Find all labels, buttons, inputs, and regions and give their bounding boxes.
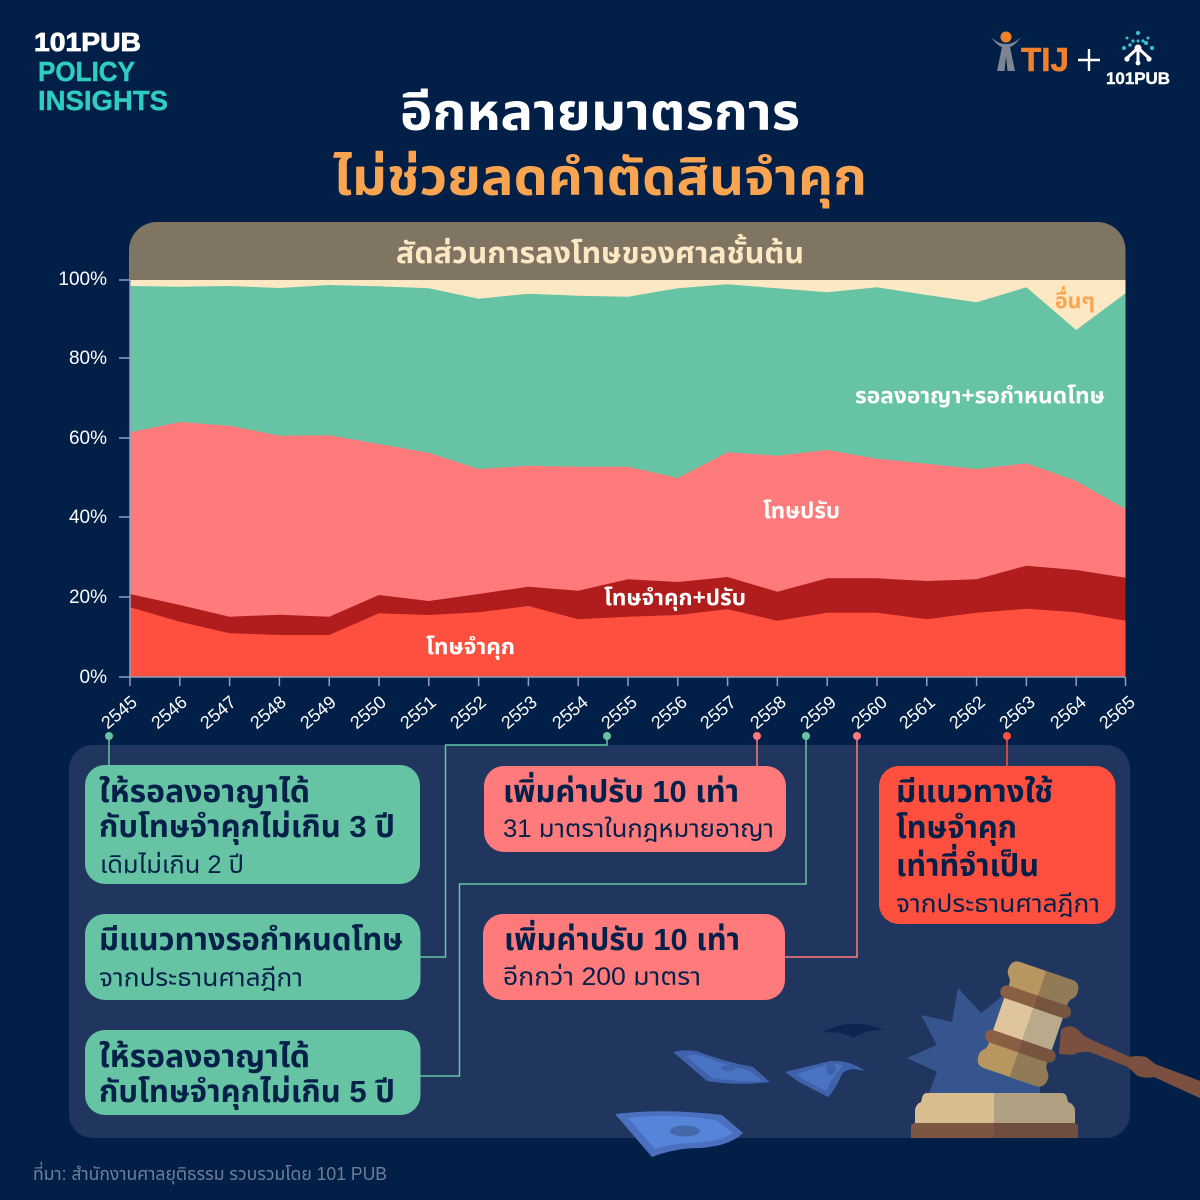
area: others <box>130 280 1126 677</box>
x axis year labels: 2555 <box>597 692 641 733</box>
panel: policy timeline background <box>69 745 1130 1138</box>
card: suspended sentence up to 5 years: กับโทษจำคุกไม่เกิน 5 ปี <box>99 1074 395 1110</box>
icon: gavel base <box>911 1093 1078 1138</box>
area: suspended sentence <box>130 284 1126 677</box>
label: others: อื่นๆ <box>1055 286 1095 313</box>
card: guideline on deferred sentencing: มีแนวทางรอกำหนดโทษ <box>99 922 403 957</box>
icon: bill large <box>615 1111 743 1157</box>
card: imprisonment only as necessary: โทษจำคุก <box>896 810 1017 846</box>
card: imprisonment only as necessary: เท่าที่จำเป็น <box>896 843 1039 883</box>
card: imprisonment only as necessary: มีแนวทางใช้ <box>896 774 1053 809</box>
icon: gavel handle <box>1060 1027 1200 1097</box>
label: jail plus fine: โทษจำคุก+ปรับ <box>604 585 746 611</box>
y axis labels: 60% <box>69 428 107 449</box>
card: guideline on deferred sentencing <box>85 914 420 1000</box>
y axis labels: 20% <box>69 587 107 608</box>
icon: TIJ figure <box>991 32 1021 71</box>
x axis year labels: 2552 <box>446 692 490 733</box>
label: fine: โทษปรับ <box>763 498 840 523</box>
x axis year labels: 2551 <box>396 692 440 733</box>
card: suspended sentence up to 3 years: กับโทษจำคุกไม่เกิน 3 ปี <box>99 809 395 845</box>
card: suspended sentence up to 3 years <box>85 765 420 884</box>
x axis year labels: 2561 <box>895 692 939 733</box>
logo: 101PUB Policy Insights: POLICY <box>38 56 135 87</box>
icon: bill right <box>785 1061 865 1097</box>
timeline markers <box>105 732 1011 740</box>
icon: burst <box>907 988 1040 1093</box>
x axis year labels: 2560 <box>847 692 891 733</box>
label: jail: โทษจำคุก <box>426 634 515 660</box>
chart: stacked area of first-instance court sentences <box>58 222 1139 733</box>
chart header <box>129 222 1126 280</box>
y axis labels: 80% <box>69 348 107 369</box>
y axis labels: 40% <box>69 507 107 528</box>
area: jail plus fine <box>130 566 1126 677</box>
card: imprisonment only as necessary: จากประธานศาลฎีกา <box>896 890 1100 918</box>
logo: 101PUB Policy Insights: INSIGHTS <box>38 85 168 116</box>
x axis year labels: 2559 <box>796 692 840 733</box>
title <box>333 84 867 208</box>
x axis year labels: 2563 <box>995 692 1039 733</box>
chart header: สัดส่วนการลงโทษของศาลชั้นต้น <box>396 233 804 270</box>
logo: TIJ + 101PUB <box>991 31 1170 88</box>
x axis year labels: 2565 <box>1095 692 1139 733</box>
axes <box>119 280 1126 686</box>
x axis year labels: 2558 <box>746 692 790 733</box>
logo: 101PUB Policy Insights: 101PUB <box>34 27 141 57</box>
connector lines <box>109 736 1007 1076</box>
x axis year labels: 2548 <box>246 692 290 733</box>
card: fines up 10x, 200+ sections: เพิ่มค่าปรับ 10 เท่า <box>504 919 740 957</box>
y axis labels: 100% <box>58 269 107 290</box>
x axis year labels: 2550 <box>346 692 390 733</box>
x axis year labels: 2553 <box>497 692 541 733</box>
icon: gavel head <box>975 959 1081 1089</box>
icon: flying bill silhouette <box>821 1024 884 1038</box>
area: jail <box>130 606 1126 677</box>
x axis year labels: 2562 <box>945 692 989 733</box>
icon: bill upper <box>673 1050 770 1084</box>
logo: 101PUB Policy Insights <box>34 27 168 116</box>
card: fines up 10x, 31 sections: เพิ่มค่าปรับ 10 เท่า <box>503 771 739 809</box>
card: suspended sentence up to 5 years: ให้รอลงอาญาได้ <box>99 1039 310 1074</box>
illustration: gavel and money <box>615 959 1200 1157</box>
x axis year labels: 2549 <box>296 692 340 733</box>
logo: TIJ + 101PUB: 101PUB <box>1106 69 1170 88</box>
icon: 101PUB tree <box>1122 31 1154 65</box>
title: อีกหลายมาตรการ <box>400 84 800 142</box>
card: imprisonment only as necessary <box>879 766 1116 924</box>
y axis labels <box>58 269 107 688</box>
source note: ที่มา: สำนักงานศาลยุติธรรม รวบรวมโดย 101 PUB <box>33 1161 387 1185</box>
card: suspended sentence up to 3 years: ให้รอลงอาญาได้ <box>99 774 310 809</box>
x axis year labels: 2556 <box>647 692 691 733</box>
x axis year labels: 2547 <box>196 692 240 733</box>
x axis year labels: 2546 <box>147 692 191 733</box>
x axis year labels: 2545 <box>97 692 141 733</box>
label: suspended: รอลงอาญา+รอกำหนดโทษ <box>855 383 1105 408</box>
card: guideline on deferred sentencing: จากประธานศาลฎีกา <box>99 964 303 992</box>
card: fines up 10x, 200+ sections: อีกกว่า 200 มาตรา <box>503 963 701 991</box>
card: fines up 10x, 31 sections: 31 มาตราในกฎหมายอาญา <box>503 815 774 843</box>
x axis year labels: 2554 <box>548 692 592 733</box>
title: ไม่ช่วยลดคำตัดสินจำคุก <box>333 149 867 208</box>
card: suspended sentence up to 3 years: เดิมไม่เกิน 2 ปี <box>100 851 244 879</box>
x axis year labels <box>97 692 1139 733</box>
logo: TIJ + 101PUB: TIJ <box>1021 41 1069 78</box>
x axis year labels: 2564 <box>1046 692 1090 733</box>
card: fines up 10x, 31 sections <box>484 766 786 852</box>
y axis labels: 0% <box>80 667 107 688</box>
x axis year labels: 2557 <box>696 692 740 733</box>
card: fines up 10x, 200+ sections <box>483 914 785 1000</box>
card: suspended sentence up to 5 years <box>85 1030 420 1115</box>
area: fine <box>130 422 1126 677</box>
